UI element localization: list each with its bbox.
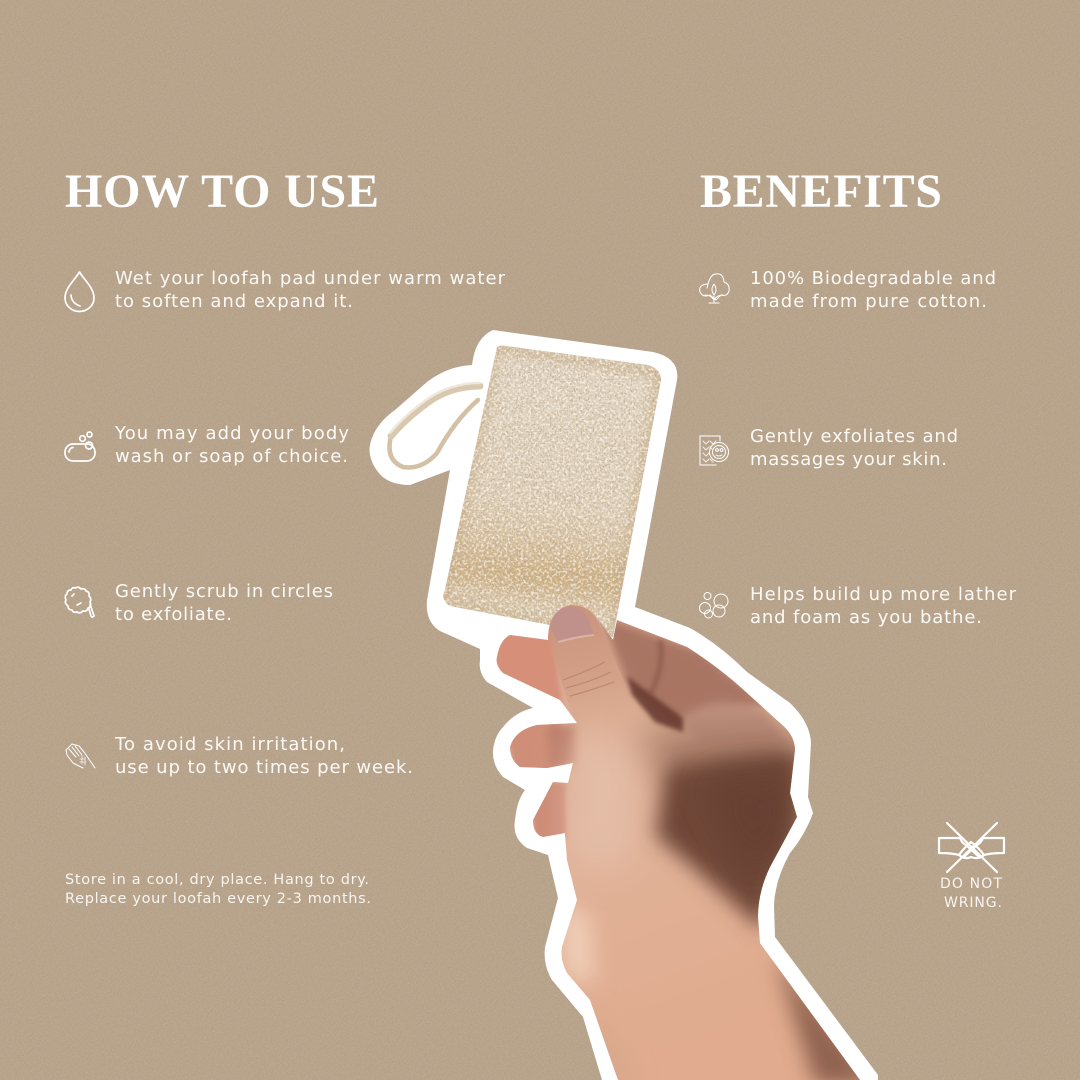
step 3: scrub xyxy=(65,581,333,625)
benefit 3 text: Helps build up more lather xyxy=(750,584,1017,605)
palm light xyxy=(572,730,640,870)
icon: crossed-out wring xyxy=(939,823,1004,872)
step 2 text: wash or soap of choice. xyxy=(115,446,348,467)
icon: textured pad with face xyxy=(700,436,728,465)
white sticker outline xyxy=(370,330,878,1080)
heading: how to use: HOW TO USE xyxy=(65,165,379,218)
shadow on back of hand xyxy=(655,750,800,930)
step 3 text xyxy=(115,581,333,625)
do not wring text xyxy=(940,876,1002,911)
forearm shadow xyxy=(770,962,860,1080)
light on wrist xyxy=(560,905,595,985)
thumb xyxy=(548,605,622,692)
step 4 text: To avoid skin irritation, xyxy=(114,734,345,755)
do not wring text: WRING. xyxy=(944,895,1002,911)
step 1 text: to soften and expand it. xyxy=(115,291,353,312)
hand xyxy=(496,605,860,1080)
hand holding loofah sticker xyxy=(370,330,880,1080)
mid shade xyxy=(640,725,795,810)
loofah hanging loop xyxy=(390,383,480,467)
step 3 text: Gently scrub in circles xyxy=(115,581,333,602)
benefit 3 text: and foam as you bathe. xyxy=(750,607,982,628)
heading: benefits: BENEFITS xyxy=(700,165,942,218)
icon: hand on skin xyxy=(66,744,95,768)
benefit 3: lather xyxy=(700,584,1017,628)
benefit 1 text: made from pure cotton. xyxy=(750,291,987,312)
benefit 2 text: massages your skin. xyxy=(750,449,947,470)
benefit 2 text: Gently exfoliates and xyxy=(750,426,958,447)
benefit 2: exfoliates xyxy=(700,426,958,470)
benefit 2 text xyxy=(750,426,958,470)
step 1 text xyxy=(115,268,506,312)
fingers behind thumb xyxy=(598,620,764,721)
icon: loofah sponge xyxy=(65,587,94,617)
icon: cotton xyxy=(700,274,729,303)
icon: bubbles xyxy=(700,592,728,618)
storage note xyxy=(65,872,371,907)
icon: water drop xyxy=(65,272,94,312)
step 4 text: use up to two times per week. xyxy=(115,757,413,778)
step 2 text xyxy=(114,423,349,467)
step 2: add soap xyxy=(65,423,349,467)
thumbnail xyxy=(550,607,594,642)
step 3 text: to exfoliate. xyxy=(115,604,232,625)
benefit 1 text: 100% Biodegradable and xyxy=(750,268,996,289)
benefit 3 text xyxy=(750,584,1017,628)
storage note: Store in a cool, dry place. Hang to dry. xyxy=(65,872,369,888)
do not wring symbol xyxy=(939,823,1004,911)
benefit 1 text xyxy=(750,268,996,312)
finger crease xyxy=(627,676,683,732)
loofah pad xyxy=(443,346,661,637)
step 4: skin care xyxy=(66,734,413,778)
storage note: Replace your loofah every 2-3 months. xyxy=(65,891,371,907)
step 1: wet the pad xyxy=(65,268,506,312)
benefit 1: biodegradable xyxy=(700,268,996,312)
step 1 text: Wet your loofah pad under warm water xyxy=(115,268,506,289)
step 2 text: You may add your body xyxy=(114,423,349,444)
icon: soap bar xyxy=(65,432,95,461)
do not wring text: DO NOT xyxy=(940,876,1002,892)
step 4 text xyxy=(114,734,413,778)
